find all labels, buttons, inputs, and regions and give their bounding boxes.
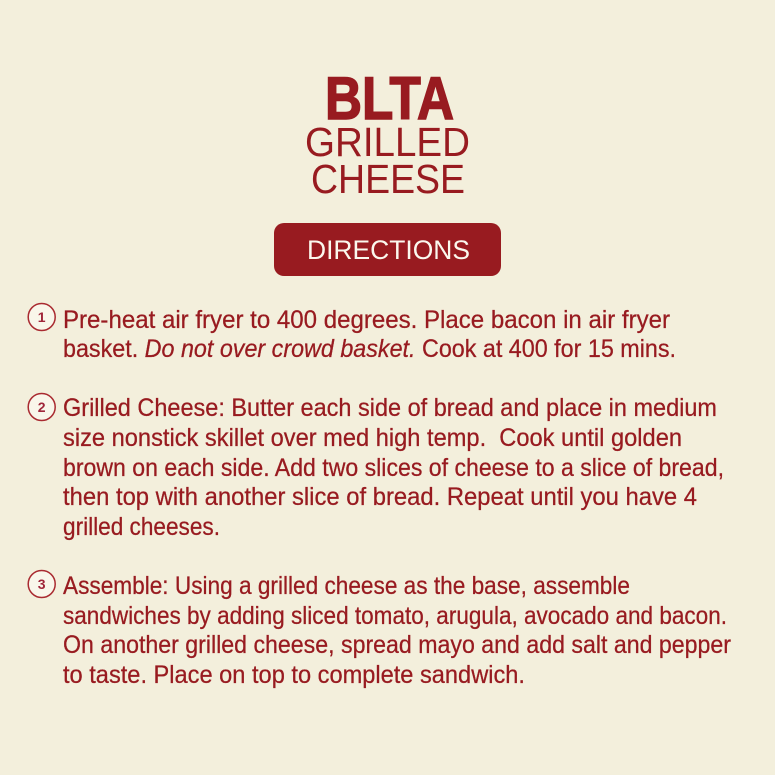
title: GRILLED <box>305 119 470 165</box>
step 3 text: to taste. Place on top to complete sandwich. <box>63 661 525 689</box>
step 3 text <box>63 572 731 689</box>
step 1 text <box>63 306 676 363</box>
title: BLTA <box>325 65 454 132</box>
icon: number 3 <box>28 570 55 598</box>
step 2 <box>28 394 724 541</box>
icon: number 3: 3 <box>38 576 46 592</box>
step 2 text: then top with another slice of bread. Repeat until you have 4 <box>63 483 697 511</box>
step 1 text: Pre-heat air fryer to 400 degrees. Place bacon in air fryer <box>63 306 670 334</box>
directions badge <box>274 223 501 276</box>
step 1 text: basket. Do not over crowd basket. Cook at 400 for 15 mins. <box>63 335 676 363</box>
title: CHEESE <box>311 156 465 202</box>
step 2 text: Grilled Cheese: Butter each side of bread and place in medium <box>63 394 717 422</box>
step 3 <box>28 570 731 689</box>
icon: number 2 <box>28 394 55 420</box>
icon: number 2: 2 <box>38 399 46 415</box>
title <box>305 65 470 202</box>
icon: number 1: 1 <box>38 309 46 325</box>
step 3 text: Assemble: Using a grilled cheese as the base, assemble <box>63 572 630 600</box>
step 3 text: On another grilled cheese, spread mayo and add salt and pepper <box>63 631 731 659</box>
step 2 text: size nonstick skillet over med high temp. Cook until golden <box>63 424 682 452</box>
step 2 text <box>63 394 724 541</box>
step 2 text: brown on each side. Add two slices of cheese to a slice of bread, <box>63 454 724 482</box>
step 1 <box>28 304 676 363</box>
directions badge: DIRECTIONS <box>307 235 470 265</box>
icon: number 1 <box>28 304 55 330</box>
step 2 text: grilled cheeses. <box>63 513 220 541</box>
